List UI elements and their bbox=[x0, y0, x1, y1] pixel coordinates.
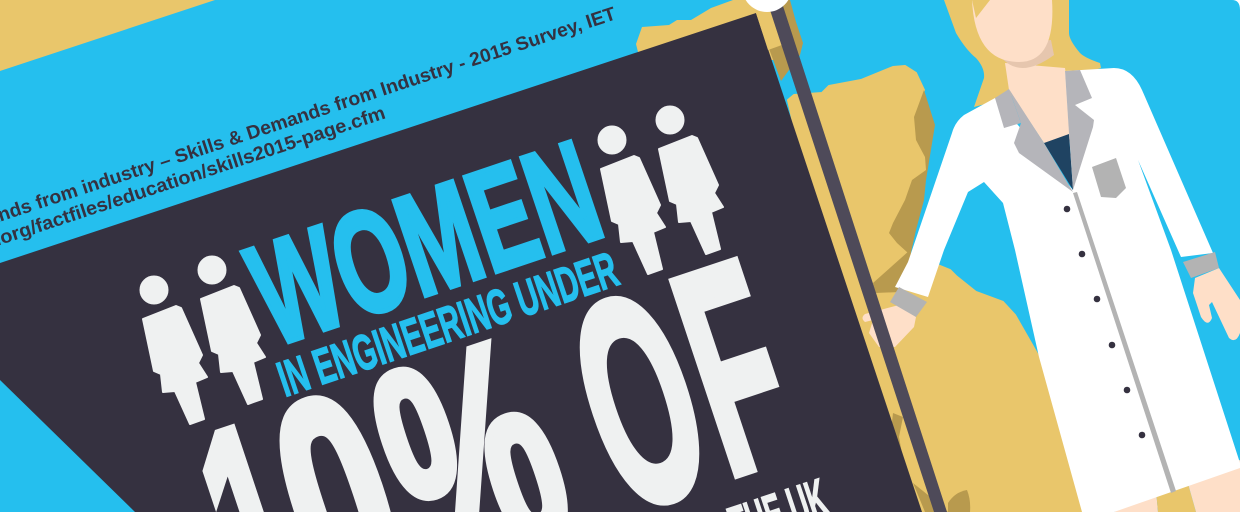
lab coat bbox=[895, 68, 1240, 512]
pole finial bbox=[742, 0, 792, 12]
right hand bbox=[1193, 268, 1240, 340]
legs and skirt bbox=[1114, 460, 1240, 512]
coat seam bbox=[1073, 192, 1176, 493]
rock behind flag top bbox=[636, 0, 803, 81]
flag pole bbox=[770, 6, 947, 512]
blouse bbox=[1044, 134, 1073, 190]
left cuff bbox=[890, 287, 927, 317]
source text: .org/factfiles/education/skills2015-page.cfm bbox=[0, 103, 388, 251]
heading: in engineering under: IN ENGINEERING UNDER bbox=[271, 242, 625, 408]
tan corner shape bbox=[0, 0, 215, 71]
icon: two women left bbox=[140, 256, 265, 424]
heading: women: WOMEN bbox=[231, 111, 619, 377]
rock behind figure bbox=[788, 66, 1090, 512]
tan strip bbox=[756, 8, 782, 50]
hair bbox=[944, 0, 1101, 107]
icon: two women right bbox=[598, 106, 723, 274]
collar and lapels bbox=[995, 70, 1094, 192]
hand gripping pole bbox=[862, 305, 916, 347]
figure: woman in lab coat bbox=[895, 0, 1240, 512]
big statistic bbox=[167, 201, 825, 512]
source text: ands from industry – Skills & Demands from Industry - 2015 Survey, IET bbox=[0, 4, 619, 230]
neck shadow bbox=[1001, 40, 1054, 68]
face bbox=[972, 0, 1052, 62]
banner bbox=[0, 13, 922, 512]
right cuff bbox=[1183, 252, 1219, 278]
neck and chest bbox=[1005, 63, 1075, 143]
hair strand bbox=[972, 0, 990, 18]
coat buttons bbox=[1064, 206, 1145, 438]
pocket bbox=[1092, 158, 1126, 198]
